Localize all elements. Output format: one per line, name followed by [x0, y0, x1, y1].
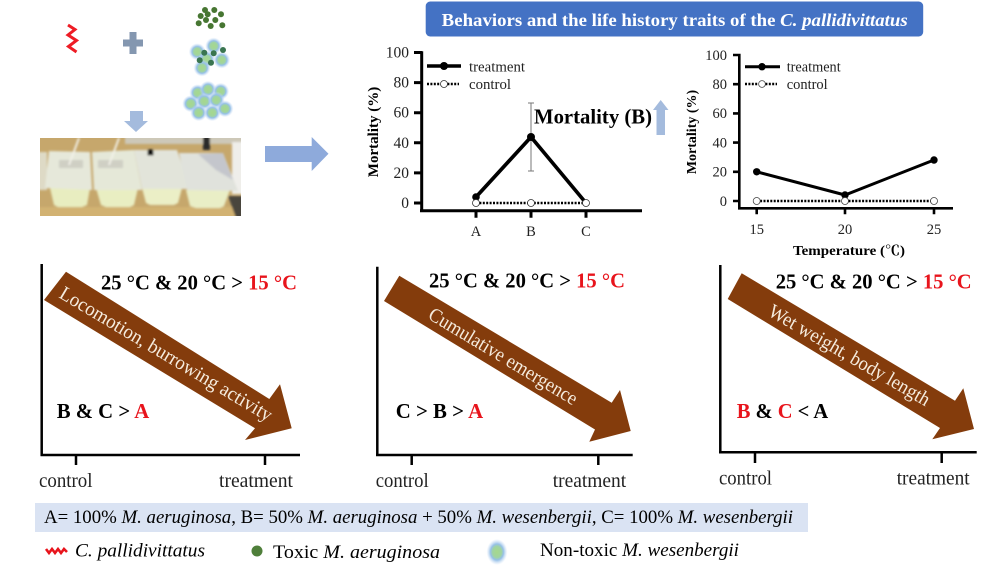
chart: mortality by food treatment: C [581, 224, 591, 240]
chart: mortality by food treatment: 20 [394, 165, 409, 182]
heading banner [426, 2, 923, 36]
legend: toxic M. aeruginosa: Toxic M. aeruginosa [273, 543, 440, 563]
chart: mortality by temperature: 100 [705, 48, 727, 64]
panel: cumulative emergence: 25 °C & 20 °C > 15 °C [429, 269, 625, 293]
icon: toxic M. aeruginosa cluster [196, 7, 225, 29]
chart: mortality by temperature: 40 [712, 136, 727, 152]
definition band [35, 503, 808, 532]
chart: mortality by temperature: 80 [712, 77, 727, 93]
icon: red worm C. pallidivittatus [68, 25, 76, 52]
chart: mortality by food treatment: 0 [401, 195, 409, 212]
chart: mortality by temperature: 20 [712, 164, 727, 180]
panel: wet weight and body length [719, 265, 977, 490]
chart: mortality by food treatment: B [526, 224, 536, 240]
definition band: A= 100% M. aeruginosa, B= 50% M. aeruginosa + 50% M. wesenbergii, C= 100% M. wesenbergii [44, 508, 793, 528]
chart: mortality by food treatment: A [471, 224, 482, 240]
panel: locomotion and burrowing: control [39, 471, 93, 492]
panel: locomotion and burrowing: 25 °C & 20 °C > 15 °C [101, 270, 297, 294]
chart: mortality by temperature: 60 [712, 106, 727, 122]
icon: plus sign [123, 32, 143, 54]
panel: cumulative emergence: control [376, 471, 429, 492]
chart: mortality by temperature: treatment [787, 60, 841, 76]
chart: mortality by food treatment: 60 [394, 104, 409, 122]
legend: non-toxic M. wesenbergii [486, 539, 739, 565]
chart: mortality by food treatment: control [469, 77, 511, 93]
panel: locomotion and burrowing: Locomotion, burrowing activity [55, 282, 276, 426]
panel: cumulative emergence: Cumulative emergence [424, 303, 582, 410]
panel: wet weight and body length: treatment [897, 468, 970, 490]
panel: locomotion and burrowing [39, 264, 300, 492]
legend: non-toxic M. wesenbergii: Non-toxic M. wesenbergii [540, 541, 739, 561]
icon: mixed cell cluster [189, 38, 230, 76]
chart: mortality by temperature: Temperature (℃) [793, 243, 905, 258]
heading banner: Behaviors and the life history traits of the C. pallidivittatus [442, 10, 908, 30]
chart: mortality by temperature: 20 [838, 222, 852, 238]
chart: mortality by food treatment: 80 [394, 74, 409, 92]
icon: non-toxic M. wesenbergii cluster [182, 81, 234, 121]
panel: locomotion and burrowing: treatment [219, 471, 294, 492]
chart: mortality by temperature: Mortality (%) [685, 89, 700, 174]
panel: wet weight and body length: B & C < A [737, 399, 829, 423]
icon: up arrow [653, 100, 668, 135]
panel: cumulative emergence: C > B > A [396, 399, 484, 423]
panel: cumulative emergence: treatment [553, 471, 627, 492]
chart: mortality by food treatment: treatment [469, 60, 525, 76]
chart: mortality by food treatment: Mortality (%) [366, 87, 382, 177]
chart: mortality by temperature: 0 [720, 194, 727, 210]
chart: mortality by food treatment: 40 [394, 135, 409, 152]
panel: locomotion and burrowing: B & C > A [57, 399, 150, 423]
icon: down arrow [124, 111, 148, 132]
chart: mortality by food treatment: 100 [386, 44, 409, 62]
chart: mortality by food treatment [366, 44, 642, 240]
panel: wet weight and body length: 25 °C & 20 °C > 15 °C [776, 269, 972, 293]
panel: cumulative emergence [376, 267, 633, 492]
legend: C. pallidivittatus: C. pallidivittatus [75, 542, 205, 562]
panel: wet weight and body length: Wet weight, body length [764, 300, 934, 411]
chart: mortality by temperature: control [787, 77, 828, 93]
panel: wet weight and body length: control [719, 468, 773, 490]
callout: Mortality (B): Mortality (B) [534, 104, 652, 128]
photo: experimental tubs [40, 138, 241, 216]
arrow: to results [265, 137, 328, 171]
chart: mortality by temperature: 25 [927, 222, 941, 238]
chart: mortality by temperature: 15 [749, 222, 764, 238]
chart: mortality by temperature [685, 48, 953, 258]
